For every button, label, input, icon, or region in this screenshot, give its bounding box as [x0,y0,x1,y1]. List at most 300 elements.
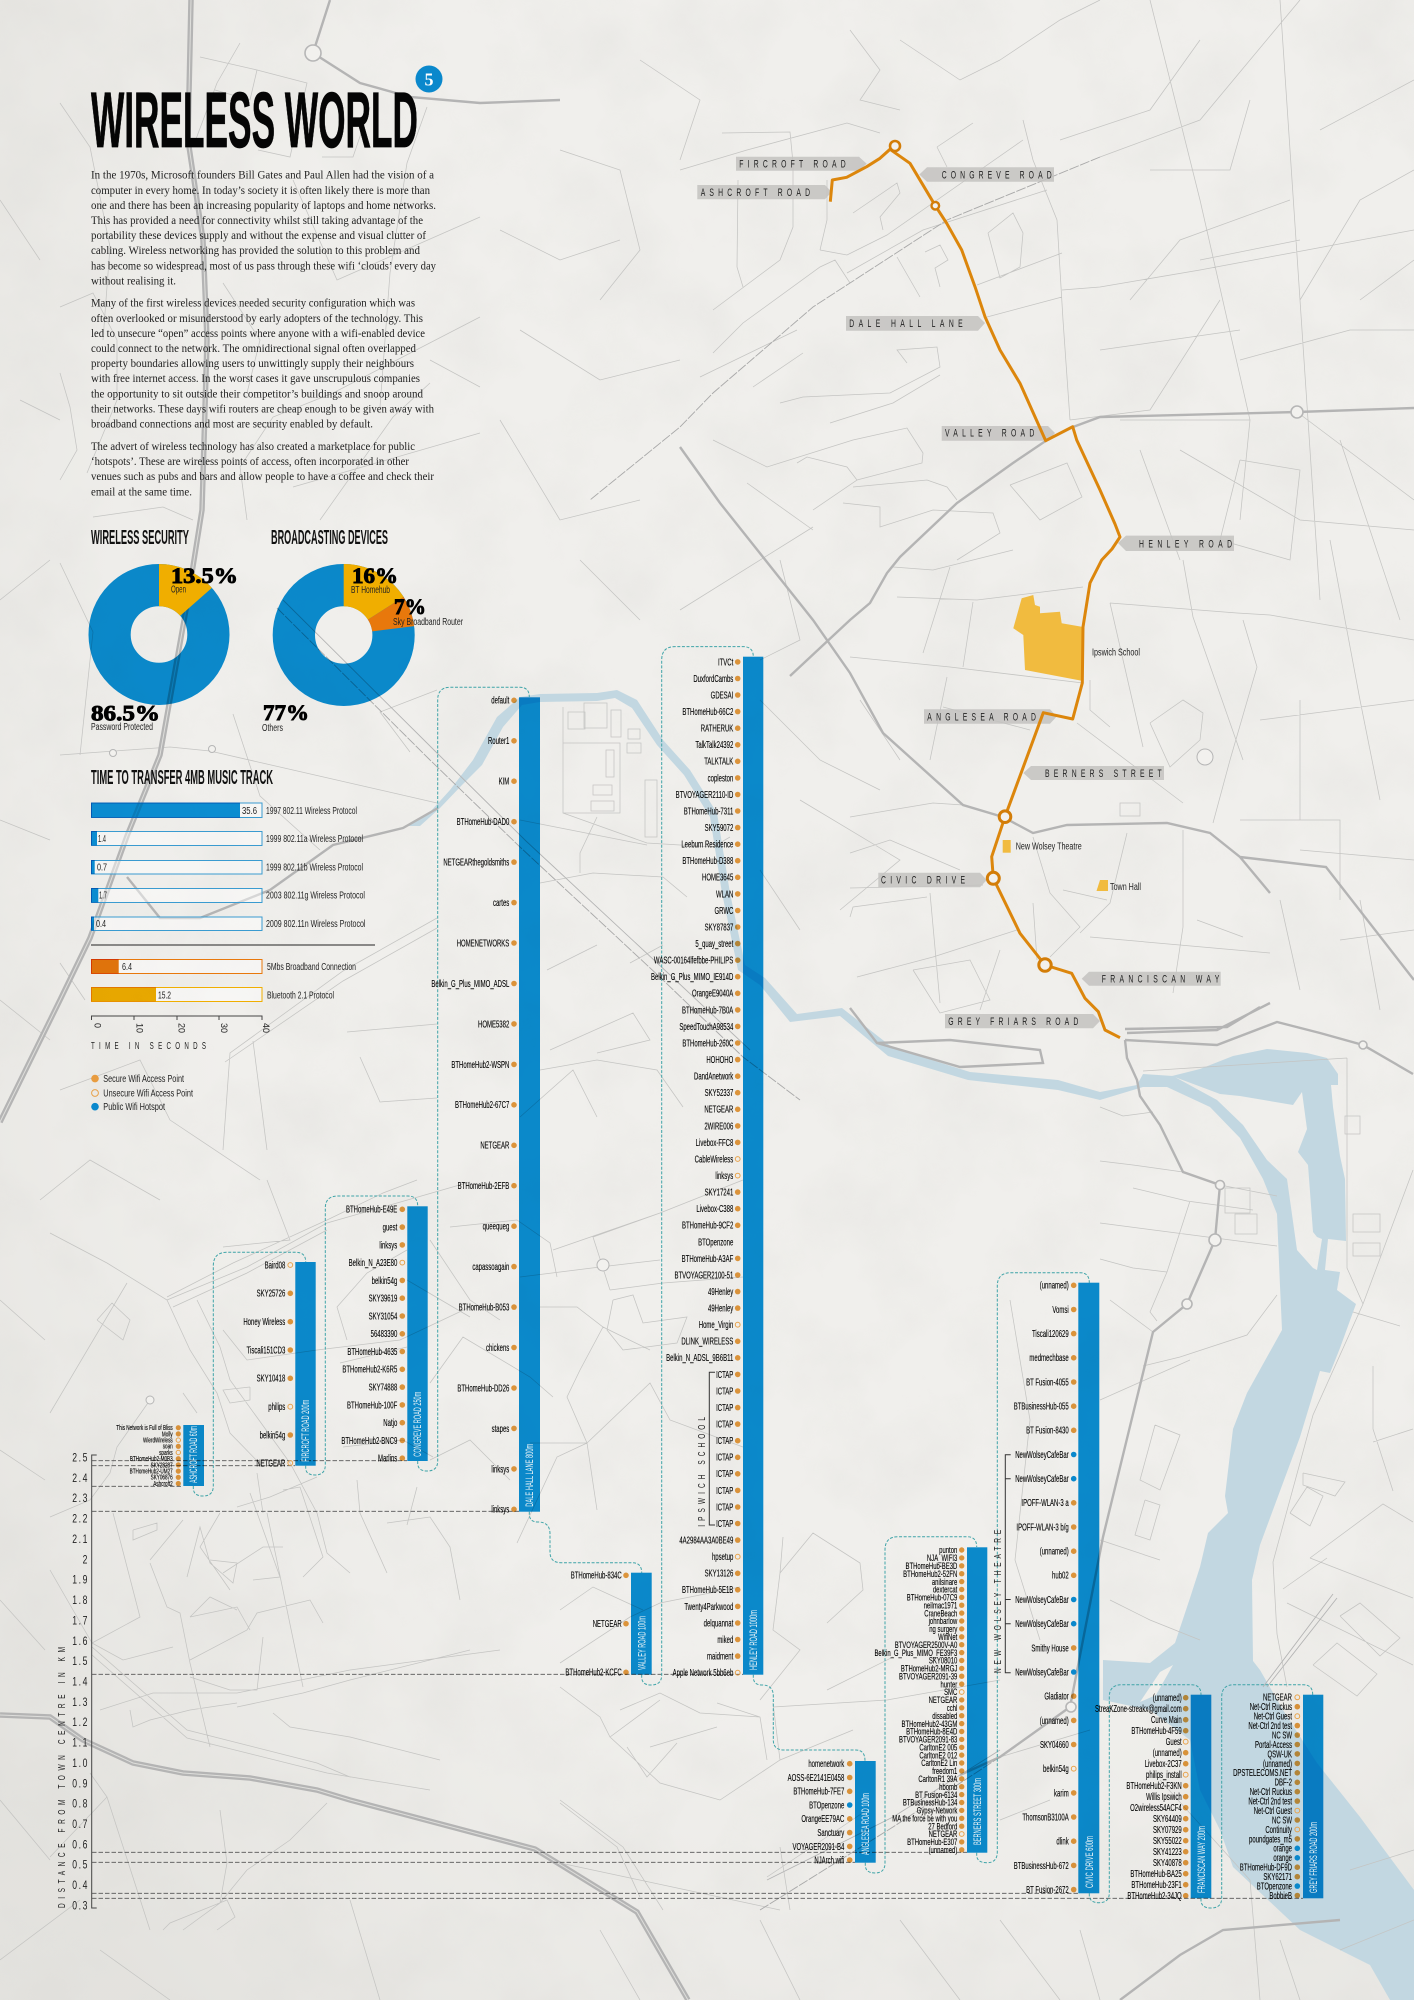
column: Henley Road: Belkin_G_Plus_MIMO_IE914D [651,972,733,983]
column: Dale Hall Lane: KIM [499,776,509,787]
column: Civic Drive: Gladiator [1044,1691,1069,1702]
column: Congreve Road: SKY31054 [369,1311,398,1322]
column: Grey Friars Road: Portal-Access [1255,1739,1292,1750]
column: Berners Street: BT Fusion-6134 [915,1789,958,1800]
column: Henley Road: SKY52337 [705,1088,734,1099]
intro text: has become so widespread, most of us pass through these wifi ‘clouds’ every day [91,258,436,272]
bar: 802.11g [91,888,365,903]
tag: Congreve Road [919,167,1054,182]
column: Civic Drive: dlink [1056,1836,1069,1847]
column: Valley Road: VALLEY ROAD 100m [636,1616,648,1670]
tag: Fircroft Road [736,157,867,171]
column: Henley Road: 2WIRE006 [704,1121,734,1132]
column: Ashcroft Road: SKY06876 [151,1475,173,1482]
column: Congreve Road: SKY74888 [369,1382,398,1393]
column: Ashcroft Road: Ashcroft2 [153,1481,173,1488]
column: Franciscan Way: (unnamed) [1153,1693,1182,1704]
column: Anglesea Road: Sanctuary [817,1828,845,1838]
column: Berners Street: Gypsy-Network [917,1805,957,1816]
callout: BT Homehub: BT Homehub [351,585,390,596]
column: Congreve Road: Marlins [378,1453,397,1464]
column: Dale Hall Lane: Router1 [488,736,510,747]
intro text: This has provided a need for connectivity whilst still taking advantage of the [91,213,423,227]
column: Civic Drive: (unnamed) [1040,1546,1069,1557]
column: Franciscan Way: SKY40878 [1153,1858,1182,1869]
tag: Anglesea Road: ANGLESEA ROAD [927,711,1036,723]
column: Berners Street: BTVOYAGER2500V-A0 [895,1639,958,1650]
column: Franciscan Way: FRANCISCAN WAY 200m [1196,1826,1208,1893]
column: Anglesea Road: NJArch wifi [814,1855,844,1866]
column: Henley Road: 5_quay_street [695,939,734,949]
bar: 802.11a: 1999 802.11a Wireless Protocol [266,834,363,845]
column: Berners Street: dextercat [933,1584,958,1595]
column: Dale Hall Lane: Belkin_G_Plus_MIMO_ADSL [431,978,510,989]
intro text: broadband connections and most are security enabled by default. [91,416,373,430]
callout: others: Others [262,723,283,734]
column: Henley Road: ICTAP [716,1502,734,1513]
column: Henley Road: 49Henley [708,1303,734,1314]
column: Berners Street: BTHomeHub-07C9 [907,1592,958,1603]
column: Anglesea Road: OrangeEE79AC [801,1814,844,1825]
column: Dale Hall Lane: capassoagain [472,1262,510,1272]
chart: broadcasting devices [262,527,463,734]
column: Berners Street: freedom1 [932,1766,958,1777]
callout: others [262,700,309,734]
bar: 802.11n: 0.4 [96,919,106,930]
legend: hotspot: Public Wifi Hotspot [103,1102,165,1113]
column: Franciscan Way: BTHomeHub-BA25 [1130,1869,1182,1880]
column: Henley Road: DuxfordCambs [693,673,733,684]
column: Grey Friars Road: NETGEAR [1263,1692,1292,1703]
roundabouts [110,45,1367,1712]
column: Grey Friars Road [1233,1692,1323,1901]
column: Civic Drive: Tiscali120629 [1032,1329,1069,1339]
column: Ashcroft Road [116,1425,204,1488]
column: Anglesea Road [788,1759,876,1866]
column: Berners Street: dissabled [932,1710,957,1721]
column: Franciscan Way: SKY64409 [1153,1814,1182,1825]
column: Civic Drive: BTBusinessHub-672 [1014,1860,1069,1871]
column: Valley Road: BTHomeHub-834C [571,1570,622,1581]
bar: 802.11b: 1999 802.11b Wireless Protocol [266,862,363,873]
column: Ashcroft Road: BTHomeHub2-UM27 [130,1469,173,1476]
distance axis [55,1452,97,1913]
column: Henley Road: OrangeE9040A [692,988,734,999]
column: Valley Road [565,1570,652,1678]
column: Congreve Road: 56483390 [371,1329,398,1340]
column: Henley Road: ICTAP [716,1469,734,1480]
column: Fircroft Road: SKY25726 [257,1288,286,1299]
column: Henley Road: Apple Network 5bb6eb [673,1668,734,1679]
bracket: Ipswich School: IPSWICH SCHOOL [695,1417,707,1527]
column: Ashcroft Road: SKY28287 [151,1463,173,1470]
column: Berners Street: CarltonE2 Lin [921,1758,957,1769]
column: Henley Road: linksys [715,1171,733,1181]
column: Henley Road: BTHomeHub-D388 [682,856,734,867]
intro text: could connect to the network. The omnidirectional signal often overlapped [91,341,416,355]
column: Civic Drive: BT Fusion-2672 [1026,1885,1069,1895]
distance axis: 1.3 [72,1697,89,1709]
tag: Dale Hall Lane: DALE HALL LANE [849,317,963,329]
time axis: 30 [219,1023,229,1033]
column: Valley Road: BTHomeHub2-KCFC [565,1667,622,1678]
column: Grey Friars Road: Net-Ctrl 2nd test [1248,1721,1293,1731]
column: Berners Street: BTHomeHub-BE3D [905,1561,957,1571]
column: Henley Road: ICTAP [716,1485,734,1496]
intro text: one and there has been an increasing popularity of laptops and home networks. [91,198,436,212]
column: Berners Street: BTHomeHub-8E4D [906,1726,957,1737]
column: Henley Road: Livebox-C388 [696,1204,734,1215]
bar: broadband: 5Mbs Broadband Connection [267,962,356,973]
bar: 802.11: 1997 802.11 Wireless Protocol [266,806,357,817]
column: Anglesea Road: VOYAGER2091-B4 [792,1841,845,1852]
column: Henley Road: BTVOYAGER2110-ID [676,789,733,800]
column: Civic Drive: NewWolseyCafeBar [1015,1474,1069,1485]
column: Henley Road: HOHOHO [706,1055,734,1065]
column: Civic Drive [1014,1280,1099,1895]
column: Henley Road: ICTAP [716,1403,734,1413]
column: Dale Hall Lane [431,695,540,1515]
column: Henley Road: ICTAP [716,1369,734,1380]
column: Dale Hall Lane: cartes [493,898,509,908]
bracket: New Wolsey Theatre [991,1455,1011,1673]
column: Dale Hall Lane: BTHomeHub-DAD0 [457,817,510,828]
column: Franciscan Way: (unnamed) [1153,1748,1182,1759]
column: Henley Road: BTHomeHub-7311 [684,806,734,817]
column: Berners Street: cchl [947,1703,957,1713]
distance axis: 0.3 [72,1900,89,1913]
column: Henley Road: SpeedTouchA98534 [679,1021,734,1032]
chart: time to transfer: TIME TO TRANSFER 4MB MUSIC TRACK [91,767,273,789]
dashed connectors between roads [193,647,1313,1908]
tag: Anglesea Road [924,709,1057,724]
column: Henley Road: GDESAI [711,690,733,701]
column: Franciscan Way: SKY55022 [1153,1836,1182,1847]
column: Dale Hall Lane: DALE HALL LANE 800m [524,1444,536,1507]
column: Dale Hall Lane: BTHomeHub-DD26 [457,1383,510,1394]
column: Civic Drive: karim [1054,1788,1069,1799]
column: Berners Street: MA the force be with you [892,1813,957,1824]
column: Congreve Road: linksys [379,1240,397,1251]
column: Grey Friars Road: Net-Ctrl 2nd test [1248,1796,1293,1807]
column: Dale Hall Lane: queequeg [483,1221,510,1232]
column: Berners Street: Belkin_G_Plus_MIMO_FE39F3 [874,1647,958,1658]
bar: 802.11g: 2003 802.11g Wireless Protocol [266,891,365,902]
column: Fircroft Road: Baird08 [265,1260,286,1271]
column: Henley Road: DandAnetwork [694,1071,734,1082]
distance axis: 0.4 [72,1880,89,1893]
column: Civic Drive: belkin54g [1043,1764,1069,1775]
tag: Henley Road: HENLEY ROAD [1139,538,1232,550]
column: Berners Street: NJA_WIFI3 [927,1553,958,1564]
time axis: TIME IN SECONDS [91,1039,206,1051]
column: Berners Street: CarltonR1 39A [918,1774,958,1784]
column: Berners Street: BTBusinessHub-134 [903,1797,958,1808]
column: Franciscan Way: SKY41223 [1153,1847,1182,1858]
column: Berners Street: WifiNet [938,1632,958,1642]
column: Berners Street: BTHomeHub2-52FN [903,1568,957,1579]
column: Henley Road: Home_Virgin [699,1320,734,1331]
column: Civic Drive: IPOFF-WLAN-3 a [1021,1498,1069,1509]
column: Civic Drive: NewWolseyCafeBar [1015,1619,1069,1630]
column: Henley Road: ICTAP [716,1518,734,1529]
column: Berners Street: SKY08010 [929,1655,958,1666]
title [91,66,442,164]
column: Henley Road: TALKTALK [704,756,734,767]
time axis: 40 [261,1023,271,1033]
column: Henley Road: BTVOYAGER2100-51 [674,1270,734,1281]
column: Henley Road: SKY13126 [705,1568,734,1579]
column: Fircroft Road: NETGEAR [256,1458,285,1469]
column: Berners Street: johnbarlow [928,1616,957,1627]
column: Berners Street: BTHomeHub-E307 [907,1837,958,1848]
bar: 802.11b [91,860,363,874]
column: Fircroft Road: Honey Wireless [243,1317,285,1328]
column: Berners Street: 27 Bedford [928,1821,957,1832]
tag: Ashcroft Road [697,185,832,199]
column: Dale Hall Lane: BTHomeHub2-67C7 [455,1100,510,1111]
column: Dale Hall Lane: chickens [486,1342,509,1353]
column: Dale Hall Lane: HOME5382 [478,1019,510,1030]
column: Henley Road: ICTAP [716,1436,734,1447]
distance axis: 0.9 [72,1778,89,1791]
column: Berners Street: (unnamed) [929,1845,958,1855]
column: Berners Street: NETGEAR [929,1695,957,1706]
column: Henley Road: CableWireless [695,1154,733,1165]
column: Congreve Road: Natjo [383,1418,398,1429]
column: Henley Road: ICTAP [716,1452,734,1463]
intro text: with free internet access. In the worst cases it gave unscrupulous companies [91,371,420,385]
bar: broadband [91,959,356,974]
column: Henley Road: RATHERUK [701,723,734,734]
column: Franciscan Way [1095,1693,1211,1902]
column: Grey Friars Road: GREY FRIARS ROAD 200m [1308,1822,1320,1893]
column: Civic Drive: NewWolseyCafeBar [1015,1594,1069,1605]
tag: Dale Hall Lane [846,316,985,331]
intro text: venues such as pubs and bars and allow people to have a coffee and check their [91,469,434,483]
bar: 802.11 [91,803,357,818]
column: Dale Hall Lane: stapes [492,1423,509,1434]
column: Berners Street: BTVOYAGER2091-83 [899,1734,958,1745]
column: Henley Road: HOME3645 [702,872,734,883]
column: Henley Road: Livebox-FFC8 [696,1137,734,1148]
column: Henley Road: BTHomeHub-9CF2 [682,1220,734,1231]
column: Henley Road: DLINK_WIRELESS [681,1336,734,1347]
column: Grey Friars Road: BTHomeHub-DF9D [1240,1862,1292,1873]
column: Fircroft Road: SKY10418 [257,1373,286,1384]
tag: Valley Road [942,426,1055,441]
column: Civic Drive: (unnamed) [1040,1280,1069,1291]
column: Henley Road: SKY87837 [705,922,734,933]
column: Franciscan Way: SKY07929 [1153,1825,1182,1836]
tag: Civic Drive [878,873,987,887]
column: Anglesea Road: AOSS-6E2141E0458 [788,1772,845,1783]
column: Berners Street: CraneBeach [924,1608,957,1619]
column: Henley Road: GRWC [714,905,733,916]
text: WIRELESS WORLD [91,75,418,164]
intro text: often overlooked or misunderstood by early adopters of the technology. This [91,311,423,325]
distance axis: 2.5 [72,1452,89,1465]
column: Civic Drive: Vomsi [1052,1304,1069,1315]
intro text: ‘hotspots’. These are wireless points of access, often incorporated in other [91,454,409,468]
column: Grey Friars Road: Net-Ctrl Guest [1254,1806,1293,1816]
column: Civic Drive: (unnamed) [1040,1715,1069,1726]
distance axis: 0.7 [72,1819,89,1831]
column: Grey Friars Road: orange [1273,1843,1292,1854]
column: Franciscan Way: BTHomeHub-23F1 [1131,1880,1182,1891]
distance axis: 0.8 [72,1798,89,1811]
column: Henley Road [651,657,763,1679]
tag: Franciscan Way: FRANCISCAN WAY [1102,973,1219,985]
column: Congreve Road: belkin54g [372,1275,398,1286]
column: Henley Road: TalkTalk24392 [695,740,734,751]
column: Congreve Road [341,1204,428,1464]
intro text: computer in every home. In today’s society it is often likely there is more than [91,183,430,197]
column: Civic Drive: hub02 [1052,1570,1069,1581]
column: Berners Street: ng surgery [929,1624,957,1635]
column: Congreve Road: BTHomeHub2-K6R5 [342,1364,398,1375]
building: Town Hall [1096,880,1141,893]
column: Berners Street: hbomb [939,1781,958,1792]
distance axis: 2.4 [72,1473,89,1485]
column: Civic Drive: SKY04660 [1040,1739,1069,1750]
callout: open: Open [171,584,186,596]
tag: Berners Street: BERNERS STREET [1045,767,1162,779]
distance axis: 1.0 [72,1758,89,1770]
column: Henley Road: BTHomeHub-260C [682,1038,733,1049]
column: Civic Drive: BT Fusion-8430 [1026,1425,1069,1436]
tag: Fircroft Road: FIRCROFT ROAD [739,158,846,170]
column: Franciscan Way: BTHomeHub-4F59 [1131,1726,1182,1737]
chart: wireless security: WIRELESS SECURITY [91,527,189,549]
column: Fircroft Road: belkin54g [260,1430,286,1441]
distance axis: DISTANCE FROM TOWN CENTRE IN KM [55,1647,67,1908]
column: Valley Road: NETGEAR [593,1619,622,1630]
column: Congreve Road: BTHomeHub-100F [347,1400,397,1411]
column: Franciscan Way: BTHomeHub2-34JQ [1127,1891,1182,1902]
column: Grey Friars Road: BTOpenzone [1257,1881,1292,1892]
distance axis: 1.2 [72,1717,89,1730]
column: Fircroft Road [243,1260,316,1469]
column: Grey Friars Road: orange [1273,1853,1292,1864]
column: Civic Drive: BTBusinessHub-055 [1014,1401,1069,1412]
column: Ashcroft Road: This Network is Full of Bliss [116,1425,173,1432]
callout: open [171,563,238,596]
column: Anglesea Road: ANGLESEA ROAD 100m [860,1793,872,1855]
column: Grey Friars Road: Net-Ctrl Guest [1254,1711,1293,1722]
time axis [91,1016,271,1051]
column: Henley Road: ICTAP [716,1386,734,1397]
intro text [91,168,436,498]
column: Dale Hall Lane: linksys [491,1464,509,1475]
bar: bluetooth: Bluetooth 2.1 Protocol [267,991,334,1002]
intro text: In the 1970s, Microsoft founders Bill Gates and Paul Allen had the vision of a [91,168,435,182]
column: Henley Road: HENLEY ROAD 1000m [748,1610,760,1670]
orange route line [830,141,1120,1038]
water: river and docks [405,690,1414,2000]
column: Henley Road: ITVCt [718,657,734,668]
column: Grey Friars Road: DBF-2 [1275,1777,1292,1788]
distance axis: 1.4 [72,1676,89,1689]
column: Grey Friars Road: Net-Ctrl Ruckus [1250,1702,1292,1713]
building: Ipswich School: Ipswich School [1092,648,1140,659]
building: Town Hall: Town Hall [1110,882,1141,893]
column: Henley Road: maidment [707,1651,734,1662]
tag: Ashcroft Road: ASHCROFT ROAD [701,186,810,198]
column: Congreve Road: guest [383,1222,398,1233]
intro text: The advert of wireless technology has also created a marketplace for public [91,439,415,453]
legend: secure: Secure Wifi Access Point [103,1074,184,1085]
column: Ashcroft Road: BTHomeHub2-M0B3 [130,1456,173,1463]
column: Henley Road: BTHomeHub-66C2 [682,707,734,717]
bar: broadband: 6.4 [122,962,132,973]
column: Grey Friars Road: poundgates_m5 [1249,1834,1292,1845]
bar: 802.11b: 0.7 [97,862,107,873]
column: Henley Road: WLAN [716,889,733,900]
column: Civic Drive: ThomsonB3100A [1022,1812,1069,1823]
column: Grey Friars Road: NC SW [1272,1730,1292,1741]
bar: 802.11n [91,916,366,930]
column: Henley Road: BTOpenzone [698,1237,734,1248]
callout: password protected [91,701,160,733]
intro text: their networks. These days wifi routers are cheap enough to be given away with [91,401,434,415]
callout: open: 13.5% [171,563,238,588]
column: Anglesea Road: BTOpenzone [809,1800,845,1811]
column: Ashcroft Road: WierdWireless [143,1438,173,1445]
distance axis: 1.1 [72,1737,89,1750]
bar: 802.11a: 1.4 [98,834,106,845]
intro text: led to unsecure “open” access points where anyone with a wifi-enabled device [91,326,425,340]
column: Civic Drive: NewWolseyCafeBar [1015,1449,1069,1460]
bar: bluetooth [91,987,334,1002]
bar: 802.11a [91,831,363,846]
intro text: email at the same time. [91,484,192,498]
column: Dale Hall Lane: BTHomeHub-B053 [459,1302,510,1313]
legend [91,1074,193,1113]
callout: others: 77% [263,700,309,725]
column: Berners Street: SMC [944,1687,957,1698]
distance axis: 2.1 [72,1534,89,1546]
distance axis: 2.3 [72,1493,89,1506]
column: Congreve Road: SKY39619 [369,1293,398,1304]
column: Franciscan Way: StreaKZone-streakx@gmail.com [1095,1704,1182,1715]
column: Berners Street: CarltonE2 005 [919,1742,958,1753]
legend: unsecure: Unsecure Wifi Access Point [103,1088,193,1100]
column: Berners Street: BERNERS STREET 300m [972,1778,984,1845]
text: ASHCROFT ROAD 60m [188,1426,200,1483]
column: Berners Street: neilmac1971 [924,1600,958,1611]
intro text: property boundaries allowing users to unwittingly supply their neighbours [91,356,414,370]
column: Franciscan Way: Willis Ipswich [1146,1792,1182,1803]
column: Berners Street: BTHomeHub2-MRGJ [901,1663,957,1674]
column: Grey Friars Road: QSW-UK [1267,1749,1292,1760]
column: Berners Street [874,1545,987,1855]
time axis: 0 [92,1023,102,1028]
distance axis: 0.5 [72,1860,89,1872]
column: Berners Street: punton [939,1545,957,1556]
column: Henley Road: SKY17241 [705,1187,734,1198]
tag: Congreve Road: CONGREVE ROAD [942,169,1052,181]
column: Grey Friars Road: (unnamed) [1263,1758,1292,1769]
column: Dale Hall Lane: HOMENETWORKS [457,938,510,949]
column: Henley Road: Belkin_N_ADSL_9B6B11 [666,1353,734,1364]
column: Grey Friars Road: BobbieB [1269,1890,1292,1901]
column: Franciscan Way: Curve Main [1151,1715,1182,1726]
column: Franciscan Way: BTHomeHub2-F3KN [1126,1781,1182,1792]
distance axis: 2 [83,1554,89,1567]
column: Dale Hall Lane: NETGEAR [480,1140,509,1151]
intro text: Many of the first wireless devices needed security configuration which was [91,296,415,310]
